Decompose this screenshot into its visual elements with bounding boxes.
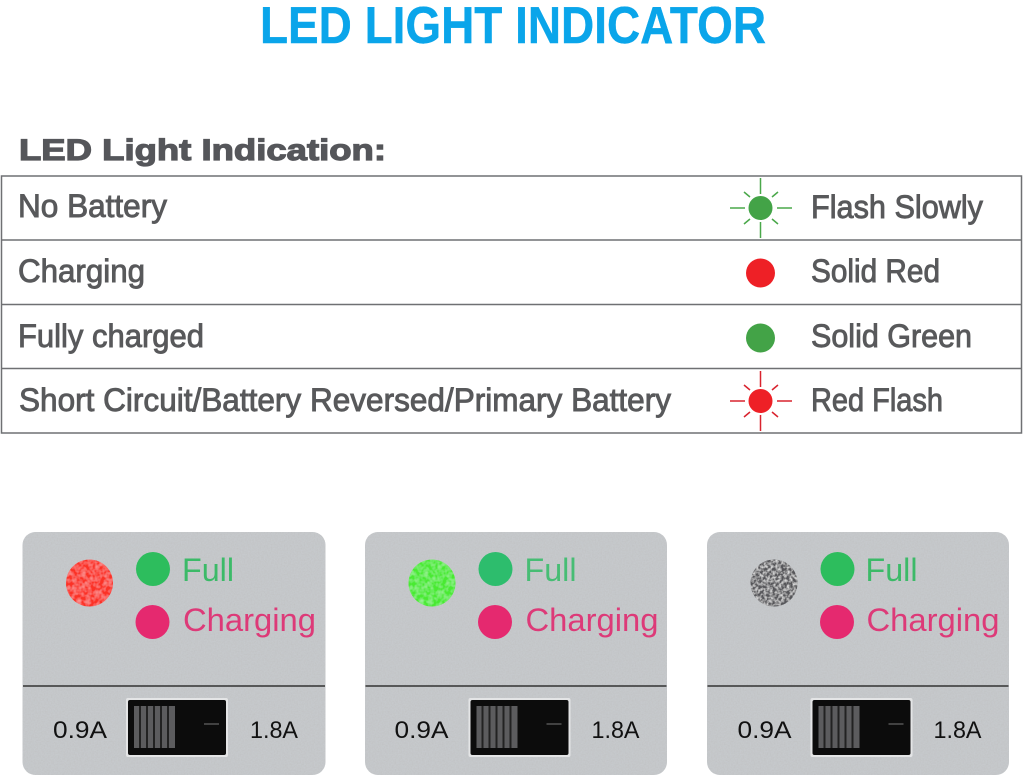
row: no battery: Flash Slowly — [811, 189, 983, 225]
panel: charger green LED — [365, 532, 667, 775]
icon: solid green LED — [746, 324, 775, 352]
label: 1.8A: 1.8A — [934, 717, 982, 744]
icon: flashing red LED — [730, 371, 792, 431]
row: charging: Charging — [18, 253, 145, 289]
indicator: charging — [478, 602, 658, 639]
icon: flashing green LED — [730, 178, 792, 238]
LED: red — [66, 560, 113, 606]
label: 0.9A: 0.9A — [53, 717, 107, 744]
indicator: charging: Charging — [183, 602, 316, 638]
row: short circuit: Short Circuit/Battery Reversed/Primary Battery — [19, 382, 671, 418]
LED: green — [408, 560, 456, 606]
row: fully charged: Fully charged — [18, 318, 204, 354]
LED: off — [750, 560, 798, 606]
indicator: charging: Charging — [866, 602, 1000, 638]
panel: charger off LED — [707, 532, 1009, 775]
label: 1.8A: 1.8A — [250, 717, 298, 744]
indicator: full: Full — [866, 552, 918, 588]
indicator: charging — [136, 602, 316, 639]
row: no battery — [18, 178, 983, 238]
label: 0.9A: 0.9A — [738, 717, 792, 744]
row: no battery: No Battery — [18, 188, 167, 224]
row: charging — [18, 253, 940, 289]
row: charging: Solid Red — [811, 253, 940, 289]
indicator: full: Full — [524, 552, 576, 588]
indicator: full: Full — [182, 552, 234, 588]
row: fully charged — [18, 318, 972, 354]
panel: charger red LED — [22, 532, 326, 775]
label: 1.8A: 1.8A — [592, 717, 640, 744]
indicator: full — [820, 552, 918, 588]
indicator: full — [136, 552, 234, 588]
indicator: charging: Charging — [526, 602, 658, 638]
row: short circuit — [19, 371, 943, 431]
row: fully charged: Solid Green — [811, 318, 972, 354]
panel: LED indication table — [1, 176, 1022, 433]
indicator: full — [478, 552, 576, 588]
switch — [468, 698, 570, 757]
row: short circuit: Red Flash — [811, 382, 943, 418]
switch — [126, 698, 228, 757]
switch — [810, 698, 912, 757]
table heading: LED Light Indication: — [19, 134, 386, 167]
label: 0.9A: 0.9A — [394, 717, 448, 744]
icon: solid red LED — [746, 258, 775, 288]
